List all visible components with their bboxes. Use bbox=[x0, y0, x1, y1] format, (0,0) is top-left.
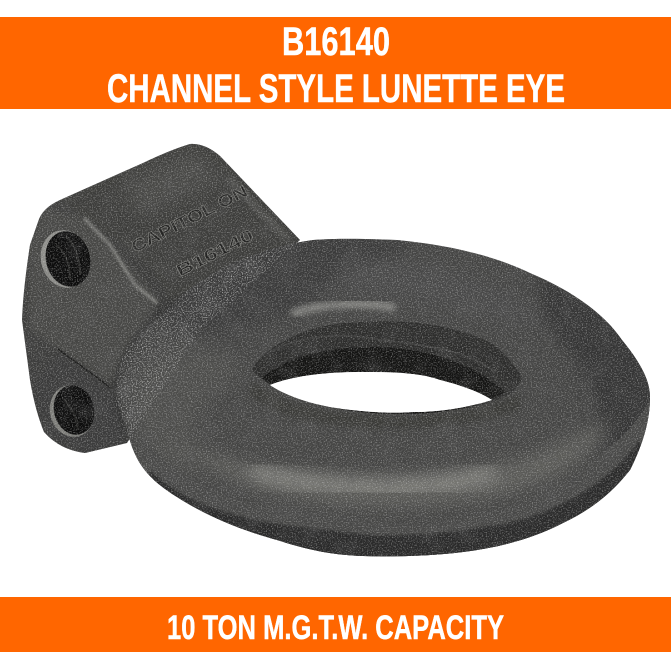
embossed mark: B16140: B16140 bbox=[173, 225, 257, 281]
lower bolt hole bbox=[44, 380, 100, 442]
casting highlight along block edge bbox=[84, 218, 157, 303]
front body light band bbox=[170, 420, 610, 506]
specular highlight on front bbox=[250, 470, 495, 487]
left body light bbox=[140, 364, 221, 460]
casting highlight along top ridge bbox=[228, 178, 287, 238]
embossed mark: CAPITOL ON: CAPITOL ON bbox=[128, 182, 251, 257]
dark lower inner wall bbox=[262, 347, 505, 414]
repaint of see-through hole over texture bbox=[270, 372, 492, 413]
dark band around hole bottom bbox=[252, 384, 518, 428]
crease between block and ring bbox=[117, 300, 176, 432]
forged ring bbox=[119, 238, 650, 556]
lit inner wall streak bbox=[270, 336, 495, 372]
highlight above the hole bbox=[292, 304, 395, 314]
lunette eye product photo bbox=[20, 140, 665, 580]
mounting block bbox=[22, 144, 300, 455]
view through the hole bbox=[270, 372, 492, 413]
upper bolt hole bbox=[35, 225, 96, 293]
cast metal surface texture bbox=[20, 140, 655, 560]
hammered skirt bbox=[136, 402, 650, 556]
upper body lighter area bbox=[341, 261, 377, 285]
lower seam shadow bbox=[148, 440, 642, 556]
capacity text: 10 TON M.G.T.W. CAPACITY bbox=[167, 609, 504, 647]
top banner bbox=[0, 17, 671, 111]
ring hole inner wall bbox=[252, 321, 522, 414]
model number heading: B16140 bbox=[282, 20, 390, 64]
shaded neck and upper body bbox=[167, 238, 416, 330]
bottom banner bbox=[0, 597, 671, 652]
right side shadow bbox=[537, 276, 650, 492]
